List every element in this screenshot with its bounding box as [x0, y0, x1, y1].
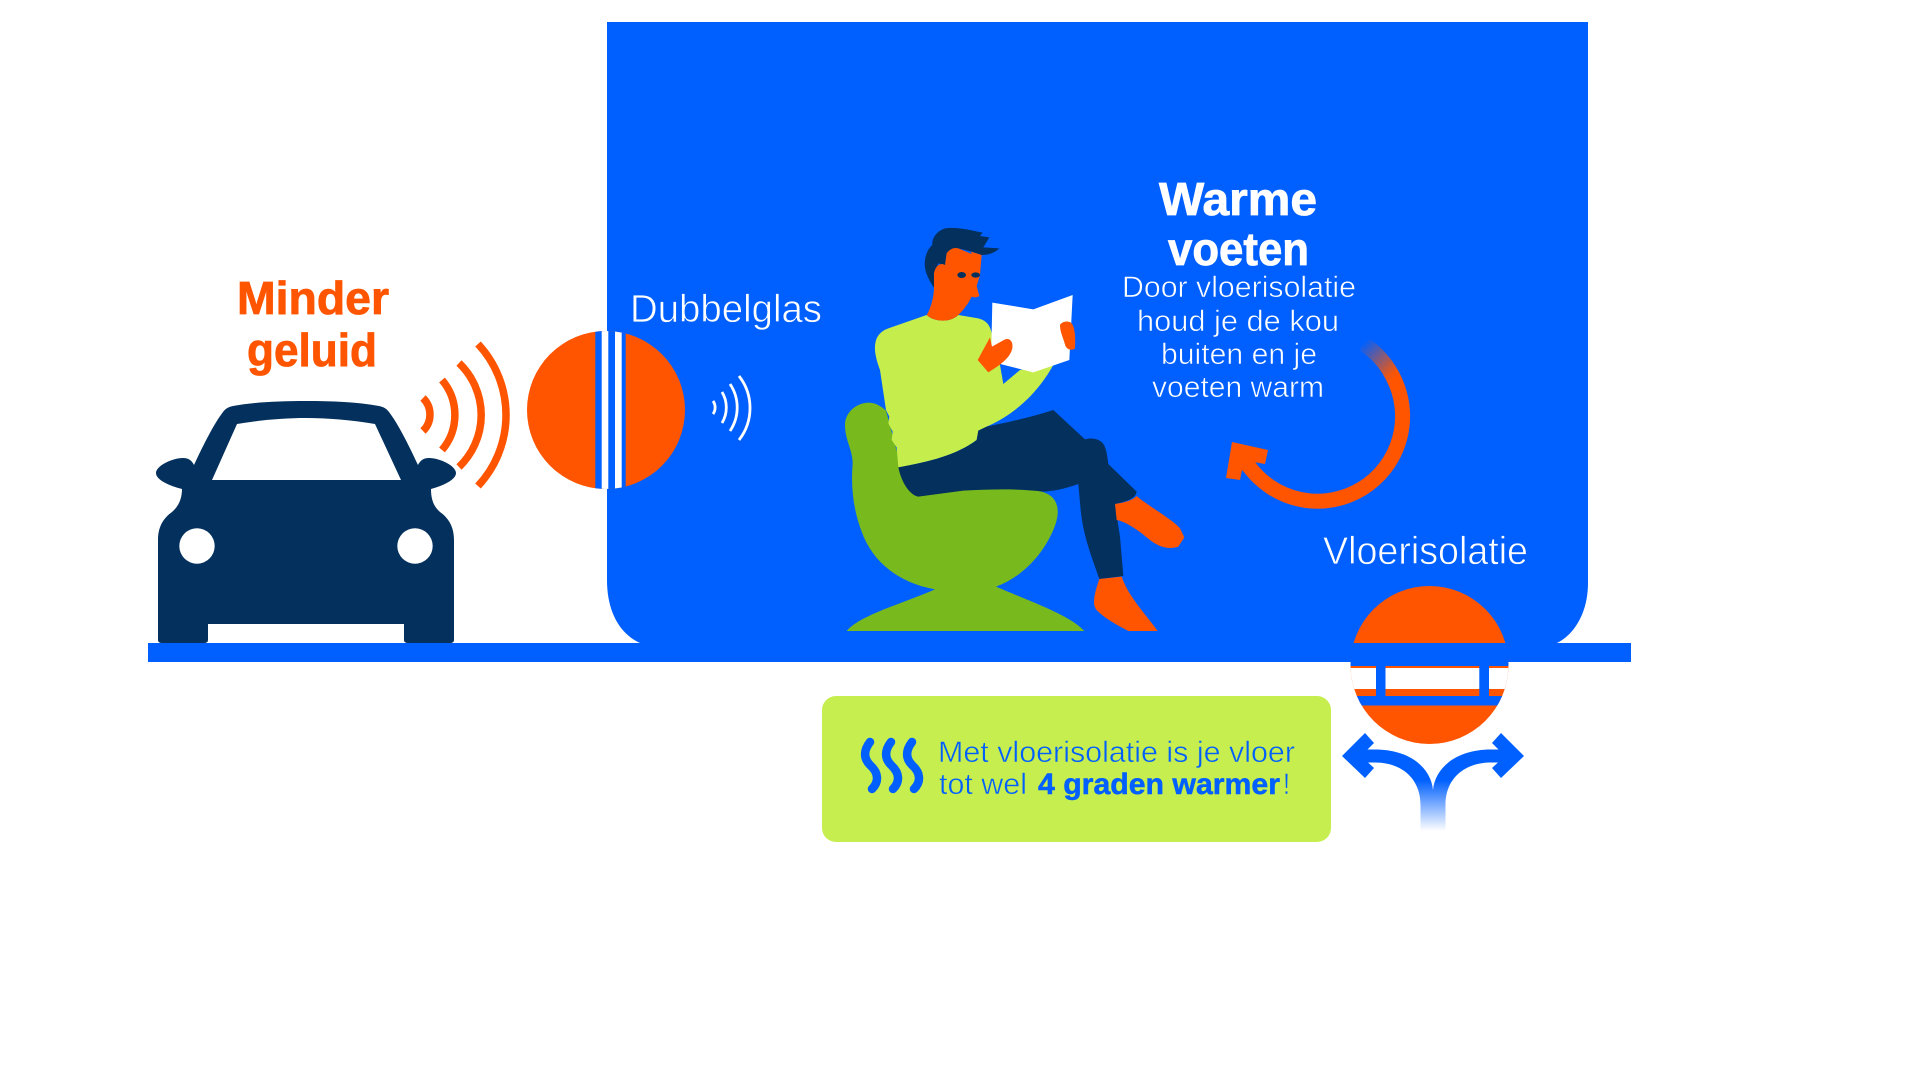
right hand	[1060, 322, 1075, 350]
left hand	[978, 337, 1013, 372]
arrow: heat loss split	[1342, 733, 1524, 831]
icon: double glazing circle	[527, 331, 685, 489]
text block: vloerisolatie uitleg	[1122, 271, 1356, 404]
floor line	[148, 643, 1631, 662]
illustration: man reading in chair	[845, 228, 1184, 631]
text block: vloerisolatie uitleg: buiten en je	[1161, 338, 1317, 371]
heading: Warme voeten: Warme	[1159, 173, 1317, 225]
label: Dubbelglas: Dubbelglas	[630, 288, 822, 331]
upper foot	[1115, 496, 1184, 548]
panel: blue house	[607, 22, 1588, 662]
chair	[845, 403, 1084, 631]
heading: Warme voeten: voeten	[1168, 223, 1309, 275]
icon: floor insulation circle	[1350, 586, 1510, 744]
callout text: tot wel	[939, 768, 1027, 801]
trousers	[898, 410, 1137, 579]
floor line in front of insulation	[1350, 643, 1510, 662]
heading: Minder geluid: Minder	[237, 272, 389, 324]
heading: Warme voeten	[1159, 173, 1317, 275]
icon: loud sound waves	[423, 344, 506, 486]
lower foot	[1094, 577, 1158, 631]
callout: 4 graden warmer	[822, 696, 1331, 842]
heading: Minder geluid: geluid	[247, 324, 377, 376]
heading: Minder geluid	[237, 272, 389, 376]
eyes	[957, 272, 980, 278]
text block: vloerisolatie uitleg: voeten warm	[1152, 371, 1324, 404]
callout text: Met vloerisolatie is je vloer	[938, 736, 1295, 769]
hair	[925, 228, 999, 291]
callout text	[938, 736, 1295, 801]
callout text: !	[1283, 768, 1290, 801]
text block: vloerisolatie uitleg: Door vloerisolatie	[1122, 271, 1356, 304]
face and neck	[927, 248, 982, 321]
icon: quiet sound waves	[713, 376, 750, 440]
arrow: warmth circulation	[1226, 344, 1403, 501]
text block: vloerisolatie uitleg: houd je de kou	[1137, 305, 1339, 338]
sweater	[875, 315, 1053, 467]
icon: car	[156, 401, 456, 643]
newspaper	[991, 295, 1073, 372]
callout text: 4 graden warmer	[1038, 768, 1280, 801]
icon: heat waves	[865, 742, 919, 789]
label: Vloerisolatie: Vloerisolatie	[1323, 530, 1528, 573]
